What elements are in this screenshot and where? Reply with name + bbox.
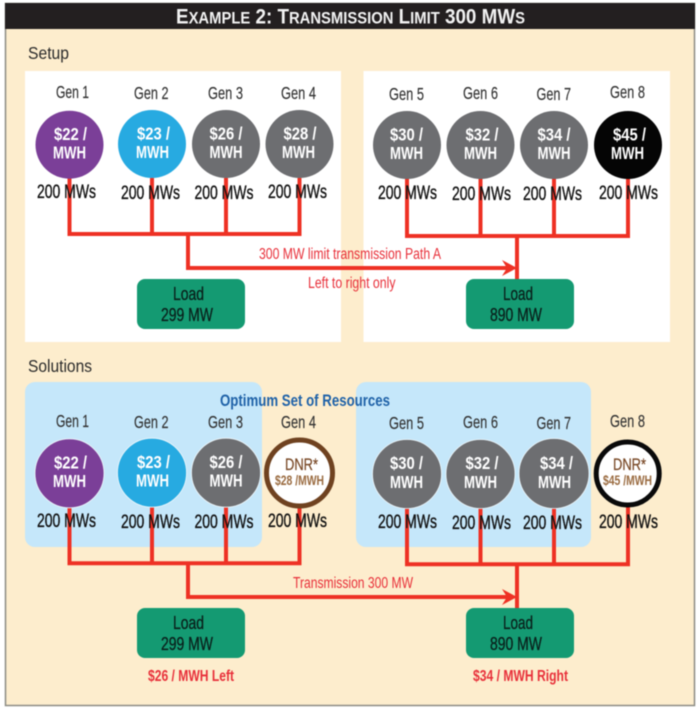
- generators: solutions right: [372, 411, 659, 534]
- generator 5: 200 MWs: [378, 512, 437, 533]
- generator 1: 200 MWs: [37, 182, 96, 203]
- generator 3: 200 MWs: [194, 183, 254, 204]
- generator 2: Gen 2: [134, 412, 168, 432]
- generator 6: 200 MWs: [452, 513, 511, 534]
- generator 1: 200 MWs: [37, 511, 96, 532]
- generator 2: [118, 412, 186, 533]
- load: solutions right: 890 MW: [490, 633, 542, 654]
- generator 6: Gen 6: [463, 83, 498, 103]
- generator 6: Gen 6: [463, 412, 498, 432]
- title banner: EXAMPLE 2: TRANSMISSION LIMIT 300 MWS: [176, 6, 525, 28]
- generator 5: [373, 84, 441, 204]
- load: setup right: 890 MW: [490, 304, 542, 325]
- panel: optimum set right: [356, 382, 591, 547]
- generator 3: Gen 3: [208, 412, 243, 432]
- generator 1: [35, 411, 104, 532]
- generator 7: 200 MWs: [523, 184, 582, 205]
- generator 4: MWH: [282, 142, 315, 162]
- generator 8: 200 MWs: [599, 183, 658, 204]
- generator 3: [192, 83, 260, 204]
- generator 5: Gen 5: [389, 413, 424, 433]
- generator 4 DNR: Gen 4: [281, 412, 316, 432]
- label: optimum set of resources: Optimum Set of Resources: [220, 391, 390, 410]
- generators: solutions left: [35, 411, 332, 533]
- price: left: $26 / MWH Left: [148, 668, 235, 685]
- generator 8: $45 /: [613, 124, 646, 144]
- generator 4 DNR: DNR*: [285, 455, 318, 474]
- generator 5: 200 MWs: [378, 183, 437, 204]
- generator 7: MWH: [538, 472, 571, 492]
- generators: setup right: [373, 82, 662, 205]
- load: setup left: 299 MW: [161, 304, 213, 325]
- generators: setup left: [36, 82, 334, 204]
- generator 4: Gen 4: [281, 83, 316, 103]
- generator 2: MWH: [136, 142, 169, 162]
- heading: solutions: Solutions: [28, 356, 92, 376]
- load: solutions left: Load: [173, 612, 204, 633]
- generator 3: 200 MWs: [194, 512, 254, 533]
- generator 2: $23 /: [137, 452, 170, 472]
- panel: setup left: [25, 71, 341, 342]
- generator 3: $26 /: [210, 124, 243, 144]
- wires: solutions: [68, 507, 630, 609]
- generator 1: $22 /: [54, 124, 87, 144]
- generator 8 DNR: 200 MWs: [599, 512, 658, 533]
- generator 7: Gen 7: [536, 413, 571, 433]
- generator 8 DNR: [596, 411, 659, 533]
- load: setup left: Load: [173, 283, 204, 304]
- generator 8 DNR: DNR*: [613, 455, 646, 474]
- generator 3: MWH: [210, 470, 242, 490]
- generator 6: 200 MWs: [452, 184, 511, 205]
- load: solutions left: [137, 608, 245, 658]
- generator 1: MWH: [53, 471, 86, 491]
- generator 3: Gen 3: [208, 83, 243, 103]
- generator 6: $32 /: [466, 124, 499, 144]
- label: direction: Left to right only: [308, 275, 396, 292]
- generator 4: 200 MWs: [268, 182, 327, 203]
- generator 8: MWH: [611, 143, 644, 163]
- generator 1: Gen 1: [56, 411, 89, 431]
- heading: setup: Setup: [28, 43, 69, 63]
- generator 5: [372, 413, 442, 533]
- generator 6: MWH: [464, 472, 497, 492]
- load: solutions right: Load: [503, 612, 533, 633]
- generator 1: MWH: [53, 142, 86, 162]
- generator 5: MWH: [390, 472, 423, 492]
- label: transmission path: 300 MW limit transmission Path A: [259, 246, 442, 263]
- generator 7: [520, 84, 588, 205]
- generator 5: $30 /: [390, 453, 423, 473]
- generator 5: Gen 5: [389, 84, 424, 104]
- load: setup right: [466, 279, 574, 329]
- generator 5: $30 /: [390, 124, 423, 144]
- label: transmission 300 MW: Transmission 300 MW: [293, 575, 413, 592]
- generator 7: $34 /: [540, 453, 573, 473]
- generator 7: 200 MWs: [523, 513, 582, 534]
- generator 2: Gen 2: [134, 83, 168, 103]
- generator 8 DNR: Gen 8: [610, 411, 645, 431]
- generator 8: [594, 82, 662, 204]
- generator 2: 200 MWs: [121, 183, 180, 204]
- load: solutions left: 299 MW: [161, 633, 213, 654]
- load: setup right: Load: [503, 283, 533, 304]
- generator 4 DNR: [266, 412, 332, 532]
- panel: setup right: [364, 71, 670, 342]
- wires: setup: [68, 178, 630, 280]
- generator 3: MWH: [210, 142, 242, 162]
- generator 4 DNR: $28 /MWH: [275, 473, 324, 488]
- panel: optimum set left: [25, 382, 262, 547]
- generator 7: MWH: [538, 143, 570, 163]
- generator 6: [446, 412, 515, 534]
- generator 3: [192, 412, 260, 533]
- generator 6: [446, 83, 514, 205]
- generator 8 DNR: $45 /MWH: [603, 473, 652, 488]
- generator 2: $23 /: [137, 124, 170, 144]
- load: solutions right: [466, 608, 574, 658]
- generator 6: $32 /: [466, 453, 499, 473]
- generator 4: $28 /: [284, 124, 317, 144]
- generator 7: $34 /: [538, 124, 571, 144]
- generator 2: MWH: [136, 470, 169, 490]
- generator 4 DNR: 200 MWs: [268, 511, 327, 532]
- generator 1: Gen 1: [56, 82, 89, 102]
- price: right: $34 / MWH Right: [473, 668, 569, 685]
- generator 6: MWH: [464, 143, 497, 163]
- title banner: [5, 3, 695, 29]
- load: setup left: [137, 279, 245, 329]
- generator 1: [36, 82, 104, 203]
- generator 7: [519, 413, 589, 534]
- generator 7: Gen 7: [536, 84, 571, 104]
- generator 5: MWH: [390, 143, 423, 163]
- generator 2: [118, 83, 186, 204]
- generator 8: Gen 8: [610, 82, 645, 102]
- generator 2: 200 MWs: [121, 512, 180, 533]
- generator 3: $26 /: [210, 452, 243, 472]
- generator 4: [266, 83, 334, 203]
- generator 1: $22 /: [54, 452, 87, 472]
